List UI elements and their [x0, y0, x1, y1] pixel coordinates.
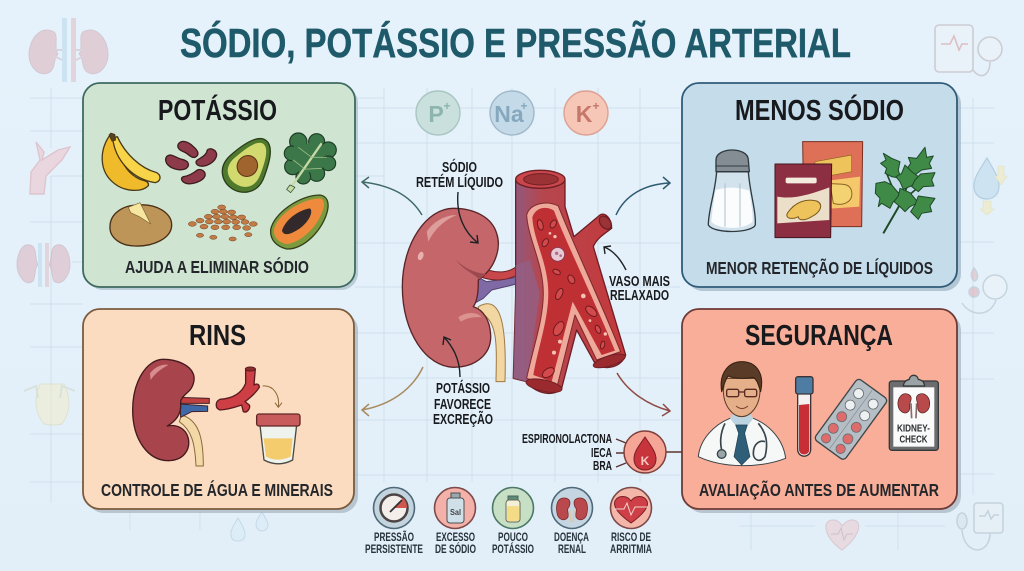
label: potassium favours excretion — [433, 380, 493, 428]
arrow: relaxed vessel — [604, 246, 626, 270]
risk: kidney disease: DOENÇA — [554, 530, 589, 544]
background icon: heart — [826, 520, 859, 550]
icon: clipboard — [889, 375, 938, 450]
risk: persistent pressure: PERSISTENTE — [365, 542, 423, 556]
background icon: water drop with arrows — [974, 158, 1007, 215]
panel: kidneys — [83, 309, 358, 513]
icon: curved arrow — [263, 386, 282, 407]
vessel openings — [525, 351, 627, 395]
icon: kale — [284, 133, 336, 193]
kidney — [402, 208, 498, 367]
arrow: sodium to kidney — [458, 192, 478, 243]
icon: blister pack — [814, 378, 888, 461]
icon: blood test tube — [796, 377, 813, 456]
risk: excess sodium: EXCESSO — [436, 530, 475, 544]
risk: arrhythmia — [610, 488, 652, 556]
background icon: kidneys top left — [29, 18, 108, 82]
risk: arrhythmia: ARRITMIA — [610, 542, 652, 556]
risk: kidney disease — [552, 488, 592, 556]
risk: low potassium: POTÁSSIO — [492, 541, 534, 556]
icon: lentils — [188, 205, 257, 241]
icon: ureter — [179, 415, 203, 466]
label: relaxed vessel — [609, 274, 670, 304]
ureter — [478, 304, 505, 382]
panel: safety — [682, 309, 961, 513]
icon: salt shaker — [708, 150, 755, 231]
icon: kidney beans — [166, 141, 217, 184]
central illustration: kidney and blood vessel — [402, 170, 627, 395]
icon: chip bags — [775, 142, 863, 238]
label: relaxed vessel: RELAXADO — [610, 288, 669, 304]
icon: papaya — [271, 195, 328, 249]
risk: arrhythmia: RISCO DE — [611, 530, 651, 544]
icon: kidney — [133, 359, 194, 461]
ion badge Na+ — [490, 91, 534, 135]
background icon: water drops bottom — [231, 512, 268, 541]
title: SÓDIO, POTÁSSIO E PRESSÃO ARTERIAL — [180, 20, 851, 66]
renal vessels — [473, 265, 520, 304]
ion badges — [416, 91, 608, 135]
label: sodium retains fluid: RETÉM LÍQUIDO — [416, 174, 503, 191]
blood vessel — [513, 170, 627, 395]
icon: blood vessel — [216, 367, 259, 412]
risk: excess sodium: Sal — [450, 508, 461, 517]
icon: urine cup — [257, 414, 300, 464]
ion badge Na+: + — [520, 99, 528, 113]
ion badge Na+: Na — [494, 101, 524, 127]
background icon: blood pressure monitor — [957, 503, 1003, 550]
risk factors row — [365, 488, 652, 556]
risk: kidney disease: RENAL — [558, 542, 586, 556]
icon: renal vessels — [179, 397, 209, 417]
background icon: bladder — [24, 384, 75, 425]
icon: doctor — [698, 362, 786, 466]
kidney highlight — [150, 365, 168, 380]
drug names: BRA — [593, 458, 612, 473]
arrow: to safety panel — [617, 373, 670, 416]
label: relaxed vessel: VASO MAIS — [609, 274, 670, 290]
arrow: potassium to kidney — [443, 337, 460, 377]
label: sodium retains fluid: SÓDIO — [442, 158, 477, 176]
heading: safety: SEGURANÇA — [745, 320, 893, 352]
risk: excess sodium — [434, 488, 476, 556]
icon: avocado — [215, 128, 283, 201]
label: potassium favours excretion: POTÁSSIO — [436, 380, 490, 397]
drug names: IECA — [591, 445, 612, 460]
background icon: gauge and stethoscope right — [962, 268, 1007, 313]
clipboard text — [897, 422, 930, 446]
background icon: small kidneys left — [17, 243, 70, 287]
risk: excess sodium: DE SÓDIO — [435, 541, 476, 556]
ion badge K+: K — [576, 101, 593, 127]
icon: bananas — [102, 133, 160, 190]
caption: kidneys: CONTROLE DE ÁGUA E MINERAIS — [101, 479, 333, 500]
heading: potassium: POTÁSSIO — [158, 93, 277, 127]
risk: low potassium — [492, 488, 534, 556]
risk: persistent pressure: PRESSÃO — [374, 529, 414, 544]
ion badge K+ — [564, 91, 608, 135]
caption: potassium: AJUDA A ELIMINAR SÓDIO — [125, 256, 309, 277]
caption: less sodium: MENOR RETENÇÃO DE LÍQUIDOS — [706, 257, 933, 278]
ion badge P+: P — [428, 101, 444, 127]
ion badge P+ — [416, 91, 460, 135]
background icon: blood vessel left — [30, 142, 70, 194]
drug names — [522, 431, 612, 473]
ion badge P+: + — [443, 99, 451, 113]
heading: kidneys: RINS — [189, 320, 246, 352]
medication callout — [522, 431, 682, 473]
panel: less sodium — [682, 83, 961, 291]
label: potassium favours excretion: EXCREÇÃO — [433, 410, 493, 428]
label: sodium retains fluid — [416, 158, 503, 191]
heading: less sodium: MENOS SÓDIO — [735, 93, 904, 127]
food icons — [102, 128, 336, 249]
arrow: to potassium panel — [362, 177, 422, 215]
label: potassium favours excretion: FAVORECE — [434, 397, 491, 413]
caption: safety: AVALIAÇÃO ANTES DE AUMENTAR — [699, 479, 939, 500]
drug names: ESPIRONOLACTONA — [522, 431, 612, 446]
icon: potassium drop — [624, 431, 666, 473]
vessel interior — [527, 203, 621, 388]
icon: parsley — [875, 147, 935, 233]
icon: potassium drop: K — [641, 454, 650, 468]
blood cells — [536, 219, 606, 380]
background icon: monitor top right — [935, 25, 1002, 76]
arrow: to less sodium panel — [616, 177, 670, 215]
clipboard text: CHECK — [900, 434, 928, 446]
arrow: to kidneys panel — [362, 367, 423, 416]
risk: low potassium: POUCO — [498, 530, 528, 544]
clipboard text: KIDNEY- — [897, 422, 930, 434]
icon: baked potato — [110, 203, 172, 246]
ion badge K+: + — [592, 99, 600, 113]
risk: persistent pressure — [365, 488, 423, 556]
panel: potassium — [83, 83, 358, 290]
